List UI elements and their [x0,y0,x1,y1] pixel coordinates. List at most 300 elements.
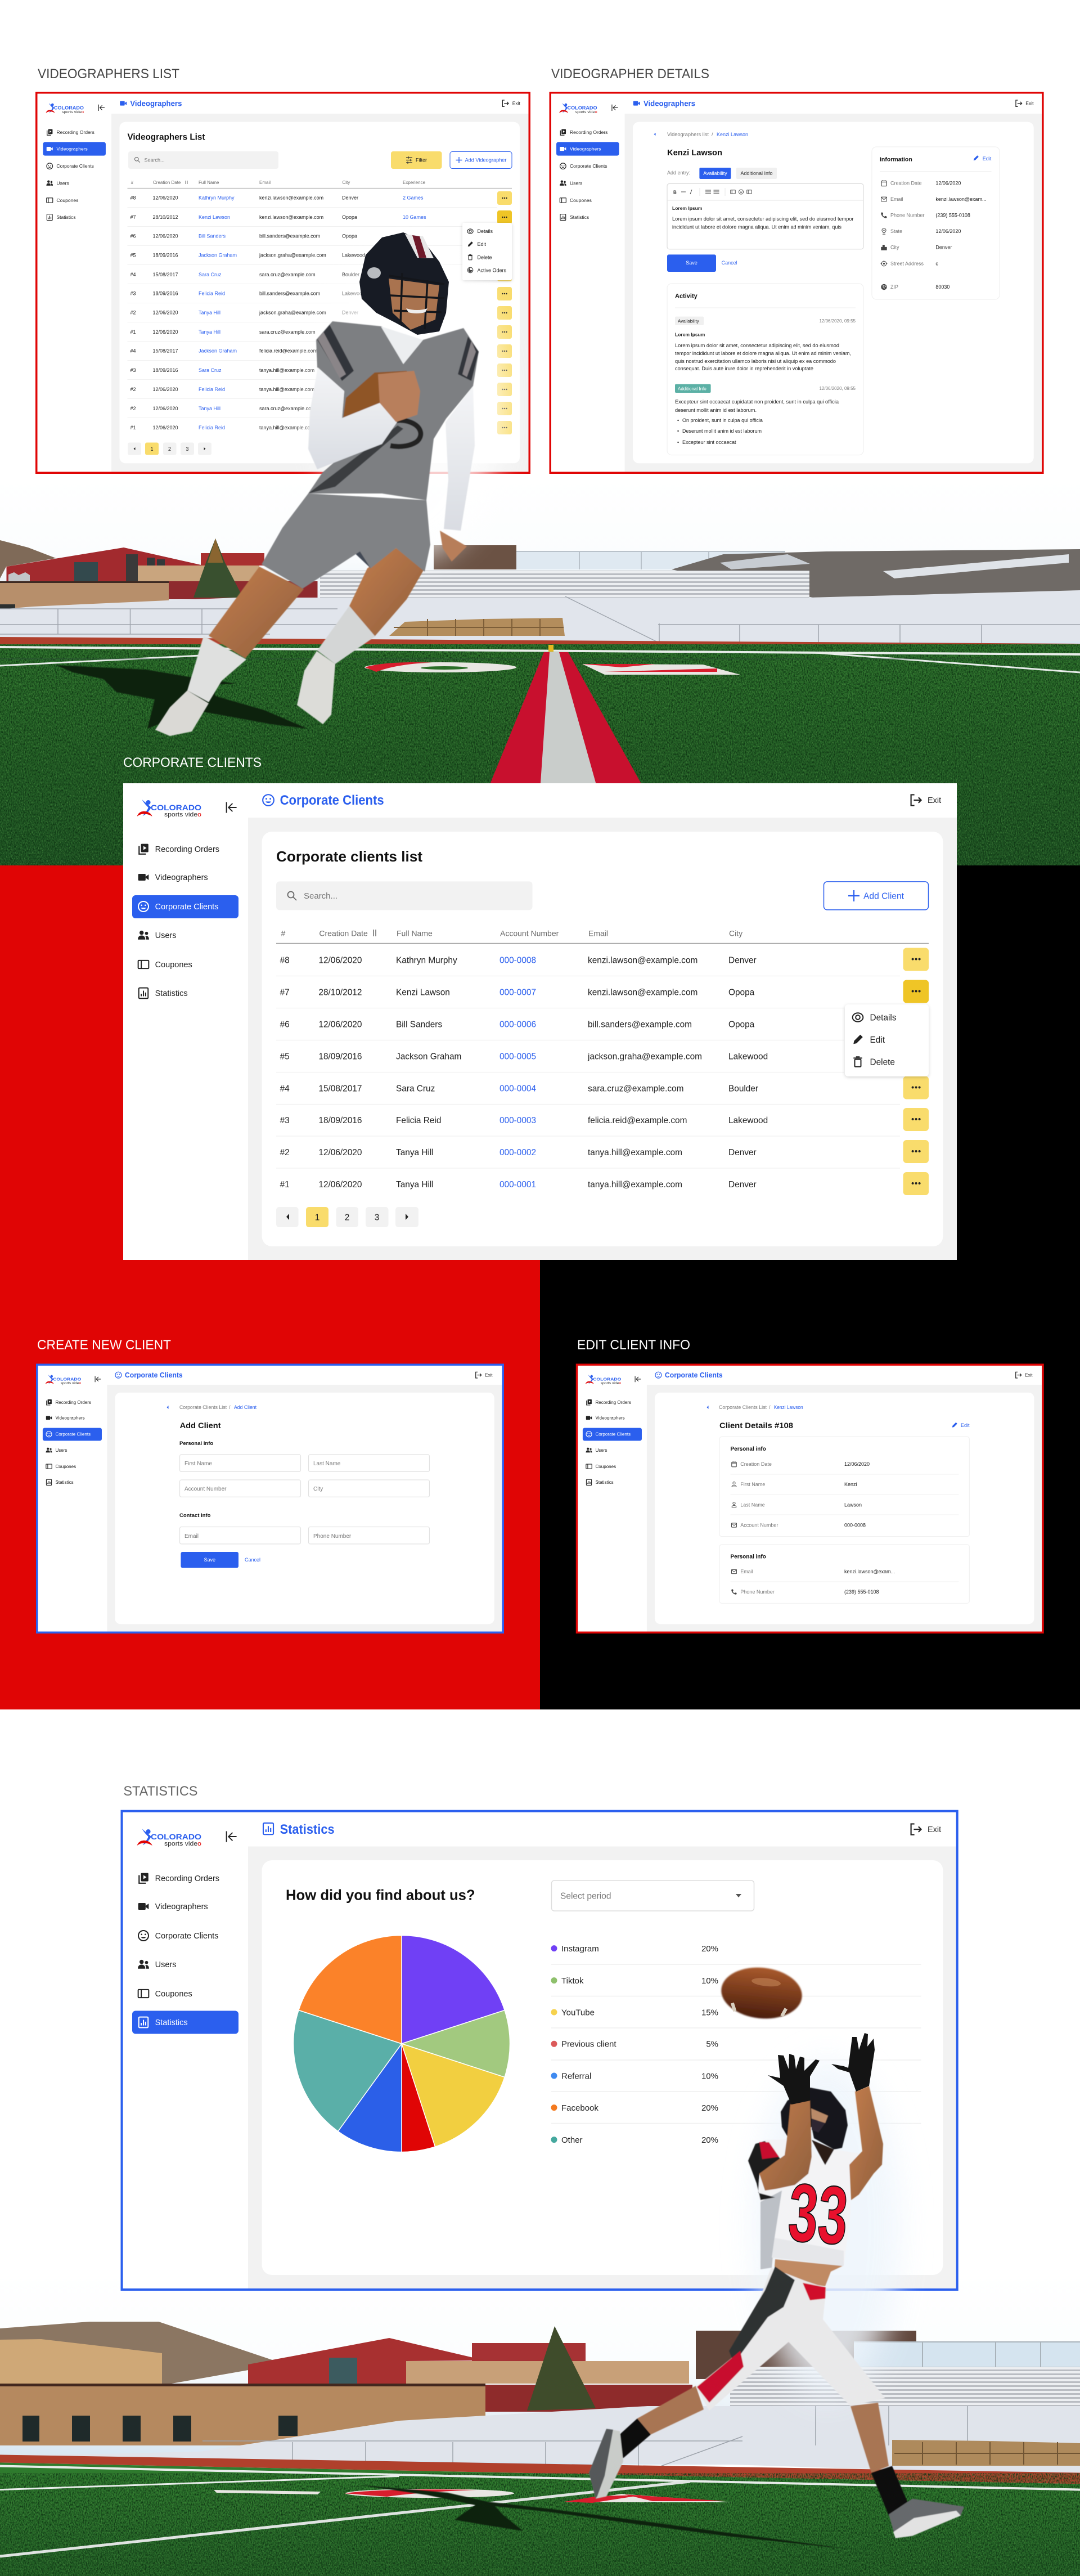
breadcrumb: / [769,1404,771,1410]
table rows: 000-0003 [500,1116,536,1125]
information card: Street Address [890,261,924,266]
sidebar navigation [138,1873,219,2027]
table rows: kenzi.lawson@example.com [588,955,698,965]
sidebar navigation: Users [155,931,176,940]
contact info fields: Email [184,1533,199,1540]
table rows: #3 [280,1116,290,1125]
contact info fields: Phone Number [313,1533,352,1540]
activity card: deserunt mollit anim id est laborum. [675,407,757,413]
logo: COLORADO [151,1833,201,1841]
card: personal info details: Last Name [740,1502,765,1507]
table rows: Tanya Hill [199,406,220,411]
header title: Videographers [644,99,695,108]
table rows: #4 [130,272,136,277]
table rows [127,195,497,430]
sidebar navigation: Users [595,1448,607,1453]
table rows: Kathryn Murphy [396,955,457,965]
entry type tabs [667,168,777,179]
personal info fields: Account Number [184,1486,227,1492]
table header: Experience [403,180,426,185]
logo: sports vide o [601,1381,622,1385]
context menu: Active Oders [477,268,507,273]
card: contact details: Phone Number [740,1589,775,1595]
table rows: jackson.graha@example.com [259,310,326,316]
table rows: 000-0008 [500,955,536,965]
section heading: corporate clients: CORPORATE CLIENTS [123,755,262,770]
table rows: #7 [130,214,136,220]
pagination: 3 [186,446,189,452]
card: personal info details: 12/06/2020 [844,1461,870,1467]
panel: create new client screen [37,1365,503,1632]
football in the air [719,1964,804,2022]
logo [46,103,84,114]
table rows: 12/06/2020 [318,1020,362,1029]
search box: Search... [304,891,338,901]
stadium photo background: bottom [0,2273,1080,2576]
table header: Creation Date [153,180,181,185]
header title: Corporate Clients [280,793,384,808]
activity card: Deserunt mollit anim id est laborum [682,428,762,434]
search box: Search... [144,158,165,163]
pagination: 2 [345,1213,349,1222]
list heading: Corporate clients list [276,848,422,865]
card: personal info details: Personal info [730,1446,766,1452]
logo: COLORADO [593,1377,621,1382]
sidebar navigation [560,129,608,221]
logo: sports vide o [575,110,597,114]
save and cancel [181,1552,260,1568]
football player one running with ball [155,232,479,736]
person name heading: Kenzi Lawson [667,148,722,158]
contact info fields: Contact Info [179,1513,211,1519]
section heading: statistics: STATISTICS [123,1784,197,1799]
logo: COLORADO [151,804,201,812]
pie legend: 15% [701,2008,718,2017]
context menu [462,223,512,280]
list heading: Videographers List [127,133,205,142]
table rows: 12/06/2020 [153,387,178,392]
table rows: Tanya Hill [199,329,220,335]
context menu: Edit [477,241,487,247]
breadcrumb: Add Client [234,1404,256,1410]
table rows: #5 [130,253,136,258]
breadcrumb: Corporate Clients List [179,1404,227,1410]
activity card: Excepteur sint occaecat [682,439,736,445]
context menu: Details [870,1013,897,1023]
table rows: tanya.hill@example.com [259,387,314,392]
activity card [667,284,863,455]
active nav highlight [556,142,619,156]
section heading: create new client: CREATE NEW CLIENT [37,1338,171,1353]
table rows: #2 [130,310,136,316]
table rows: Denver [342,310,358,316]
sidebar navigation [46,1399,91,1486]
information card: kenzi.lawson@exam... [935,196,987,202]
personal info fields: City [313,1486,323,1492]
table rows: 18/09/2016 [318,1052,362,1061]
information card: Edit [983,156,992,161]
table rows: 12/06/2020 [153,310,178,316]
sidebar navigation: Recording Orders [570,129,608,135]
breadcrumb [654,132,748,137]
pie legend: Previous client [561,2040,616,2049]
table rows: Sara Cruz [396,1084,435,1093]
activity card: Lorem ipsum dolor sit amet, consectetur adipiscing elit, sed do eiusmod [675,343,839,348]
table rows: Bill Sanders [396,1020,442,1029]
card: contact details: (239) 555-0108 [844,1589,879,1595]
table rows: #2 [130,387,136,392]
pie legend: Tiktok [561,1976,584,1986]
table rows: 18/09/2016 [153,367,178,373]
pie legend: Referral [561,2071,591,2081]
logo: sports vide o [62,110,84,114]
entry type tabs: Availability [703,170,727,176]
table rows: Jackson Graham [199,348,237,354]
activity card: tempor incididunt ut labore et dolore magna aliqua. Ut enim ad minim veniam, [675,351,851,356]
section heading: edit client info: EDIT CLIENT INFO [577,1338,690,1353]
table rows: Sara Cruz [199,272,222,277]
table rows: Felicia Reid [199,387,225,392]
football player two catching [589,2033,964,2538]
table rows: sara.cruz@example.com [259,406,316,411]
table rows: Boulder [342,272,359,277]
table header: Email [588,928,608,937]
sidebar navigation: Statistics [155,2018,188,2027]
table rows: tanya.hill@example.com [588,1180,682,1190]
jersey number: 33 [786,2166,851,2261]
card: contact details: kenzi.lawson@exam... [844,1569,895,1574]
information card [872,147,1000,299]
exit button: Exit [1025,101,1034,106]
exit button: Exit [1025,1372,1033,1377]
sidebar navigation: Coupones [55,1464,76,1469]
table rows: sara.cruz@example.com [259,329,316,335]
black background block [540,865,1080,1709]
helmet [359,232,449,335]
period select [551,1881,754,1911]
pie legend [551,1944,921,2145]
save and cancel: Save [686,260,698,266]
table rows: 000-0007 [500,988,536,997]
personal info fields [179,1440,430,1497]
information card: (239) 555-0108 [935,213,970,218]
sidebar navigation: Coupones [155,961,192,970]
breadcrumb: Videographers list [667,132,709,137]
information card: Email [890,196,903,202]
context menu: Edit [870,1035,885,1045]
sidebar collapse icon [612,105,618,111]
table rows: felicia.reid@example.com [588,1116,687,1125]
active nav highlight [43,1428,102,1440]
table rows: 12/06/2020 [153,329,178,335]
sidebar navigation: Corporate Clients [155,903,218,912]
logo [46,1375,82,1385]
information card: City [890,245,899,250]
sidebar navigation: Users [56,180,69,186]
sidebar navigation: Videographers [570,146,601,151]
table header: Email [259,180,271,185]
table header: Creation Date [319,928,368,937]
exit button [911,795,941,806]
pie legend: 20% [701,2103,718,2113]
filter button [391,151,442,169]
add videographer button: Add Videographer [465,158,506,163]
table header: Account Number [500,928,559,937]
exit button [1016,100,1034,106]
table rows: kenzi.lawson@example.com [259,195,323,201]
table rows: #4 [280,1084,290,1093]
table rows: Bill Sanders [199,233,226,239]
blue frame [37,1365,503,1632]
card: personal info details: First Name [740,1482,765,1487]
exit button [911,1824,941,1835]
pie legend: Instagram [561,1944,599,1954]
table rows: Sara Cruz [199,367,222,373]
table rows: 12/06/2020 [318,955,362,965]
card: personal info details [719,1437,969,1537]
app chrome: sidebar and header [578,1366,1042,1632]
header title: Corporate Clients [665,1371,723,1379]
information card: Creation Date [890,180,922,186]
table rows: 000-0005 [500,1052,536,1061]
table rows: sara.cruz@example.com [259,272,316,277]
table rows: Lakewood [342,290,365,296]
app chrome: sidebar and header [38,93,529,472]
table rows: 28/10/2012 [153,214,178,220]
soft white glow behind player one [318,253,503,557]
header title: Statistics [280,1822,335,1837]
blue frame [122,1811,957,2290]
pagination: 3 [375,1213,379,1222]
sidebar navigation: Corporate Clients [55,1432,91,1437]
card: personal info details: Creation Date [740,1461,772,1467]
app chrome: sidebar and header [551,93,1042,472]
save and cancel: Cancel [722,260,737,266]
breadcrumb: Kenzi Lawson [774,1404,803,1410]
table rows: 15/08/2017 [318,1084,362,1093]
table rows: 12/06/2020 [153,233,178,239]
pie legend: 10% [701,1976,718,1986]
table rows: Denver [342,195,358,201]
sidebar navigation: Recording Orders [595,1400,631,1405]
table rows: tanya.hill@example.com [259,367,314,373]
panel: videographer details screen [550,93,1043,473]
table rows: bill.sanders@example.com [259,233,320,239]
sidebar navigation: Statistics [55,1480,74,1485]
information card: 80030 [935,284,950,290]
table rows: Denver [728,1180,757,1190]
details heading: Client Details #108 [719,1421,793,1430]
save and cancel [667,254,737,272]
activity card: Additional Info [678,386,706,392]
row action buttons [903,948,929,1195]
sidebar navigation: Statistics [56,214,76,220]
pie legend: Facebook [561,2103,598,2113]
breadcrumb [706,1404,803,1410]
pie legend: YouTube [561,2008,595,2017]
activity card: consequat. Duis aute irure dolor in reprehenderit in voluptate [675,366,813,371]
section heading: videographers list: VIDEOGRAPHERS LIST [38,66,179,82]
app chrome: sidebar and header [122,1811,957,2290]
panel: edit client info screen [577,1365,1043,1632]
table rows: #2 [130,406,136,411]
app chrome: sidebar and header [123,783,957,1260]
table rows: #1 [130,329,136,335]
card: contact details: Personal info [730,1554,766,1560]
table rows: Felicia Reid [396,1116,441,1125]
table rows: #8 [130,195,136,201]
red frame [577,1365,1043,1632]
entry type tabs: Add entry: [667,170,690,176]
table rows: kenzi.lawson@example.com [259,214,323,220]
sidebar navigation: Users [155,1960,176,1969]
card: personal info details: Lawson [844,1502,862,1507]
exit button: Exit [512,101,521,106]
personal info fields: First Name [184,1461,212,1467]
table rows: Denver [728,955,757,965]
table rows: #8 [280,955,290,965]
rich text editor: Lorem Ipsum [672,205,703,211]
contact info fields [179,1513,430,1544]
sidebar navigation: Recording Orders [56,129,94,135]
table rows: #5 [280,1052,290,1061]
table rows: kenzi.lawson@example.com [588,988,698,997]
context menu: Delete [477,254,492,260]
sidebar navigation: Videographers [55,1416,85,1421]
table rows [276,955,900,1190]
search box [276,881,532,910]
stadium photo background: top [0,478,1080,865]
table rows: Lakewood [728,1052,768,1061]
sidebar collapse icon [227,802,237,813]
period select: Select period [560,1892,611,1901]
personal info fields: Last Name [313,1461,341,1467]
sidebar navigation: Recording Orders [55,1400,91,1405]
exit button [502,100,521,106]
sidebar navigation: Users [55,1448,67,1453]
table header: # [131,180,134,185]
sidebar navigation: Corporate Clients [155,1932,218,1941]
table rows: 10 Games [403,214,426,220]
logo: COLORADO [53,1377,81,1382]
information card: 12/06/2020 [935,180,961,186]
table rows: Tanya Hill [396,1180,434,1190]
active nav highlight [132,2011,238,2034]
table rows: tanya.hill@example.com [259,425,314,430]
sidebar collapse icon [95,1376,101,1382]
table header: # [281,928,286,937]
table rows: #6 [130,233,136,239]
sidebar navigation: Statistics [595,1480,614,1485]
table rows: #2 [280,1148,290,1157]
table rows: 18/09/2016 [153,253,178,258]
pagination [128,442,212,455]
chart question heading: How did you find about us? [286,1886,475,1903]
pagination: 2 [168,446,171,452]
section heading: videographer details: VIDEOGRAPHER DETAILS [551,66,709,82]
sidebar collapse icon [227,1831,237,1842]
context menu: Delete [870,1058,895,1067]
table rows: 12/06/2020 [318,1148,362,1157]
table rows: 2 Games [403,195,424,201]
information card: Phone Number [890,213,925,218]
table rows: tanya.hill@example.com [588,1148,682,1157]
sidebar navigation: Statistics [155,989,188,998]
activity card: quis nostrud exercitation ullamco laboris nisi ut aliquip ex ea commodo [675,358,836,364]
table rows: jackson.graha@example.com [259,253,326,258]
information card: c [935,261,938,266]
table rows: 000-0004 [500,1084,536,1093]
card: personal info details: Account Number [740,1523,778,1528]
table rows: Tanya Hill [199,310,220,316]
table rows: Tanya Hill [396,1148,434,1157]
sidebar navigation: Recording Orders [155,845,219,854]
form heading: Add Client [180,1421,221,1430]
save and cancel: Save [204,1557,215,1563]
soft white glow behind player two [754,2059,900,2397]
red frame [550,93,1043,473]
information card: State [890,228,902,234]
rich text editor: B [673,190,677,195]
pie legend: 20% [701,1944,718,1954]
sidebar collapse icon [635,1376,641,1382]
table rows: 12/06/2020 [153,195,178,201]
panel: statistics screen [122,1811,957,2290]
context menu [845,1004,929,1076]
sidebar navigation: Coupones [155,1990,192,1999]
active nav highlight [583,1428,642,1440]
table rows: #1 [280,1180,290,1190]
table header: Full Name [397,928,433,937]
gloves [768,2033,875,2104]
edit link [952,1422,970,1428]
table header [127,180,512,189]
exit button [476,1372,493,1378]
activity card: Activity [675,293,698,299]
red frame [37,93,529,473]
table rows: Opopa [342,214,357,220]
edit link: Edit [961,1422,970,1428]
logo [137,1829,201,1847]
breadcrumb: / [712,132,713,137]
table rows: bill.sanders@example.com [259,290,320,296]
activity card: On proident, sunt in culpa qui officia [682,418,763,423]
header title: Corporate Clients [125,1371,183,1379]
add videographer button [450,152,512,169]
add client button [824,882,928,910]
sidebar navigation: Corporate Clients [595,1432,631,1437]
table rows: 12/06/2020 [153,406,178,411]
active nav highlight [43,142,106,156]
table rows: Jackson Graham [396,1052,461,1061]
table rows: Boulder [728,1084,758,1093]
sidebar navigation: Videographers [155,1902,208,1911]
logo [586,1375,622,1385]
information card: ZIP [890,284,898,290]
app chrome: sidebar and header [38,1366,502,1632]
table rows: #3 [130,290,136,296]
table header: City [729,928,742,937]
table rows: sara.cruz@example.com [588,1084,683,1093]
table header [276,928,929,944]
pie chart [293,1936,510,2152]
table rows: Kenzi Lawson [396,988,450,997]
table rows: Lakewood [342,253,365,258]
personal info fields: Personal Info [179,1440,213,1447]
pie legend: 20% [701,2135,718,2145]
sidebar navigation: Coupones [570,198,592,203]
exit button: Exit [485,1372,493,1377]
